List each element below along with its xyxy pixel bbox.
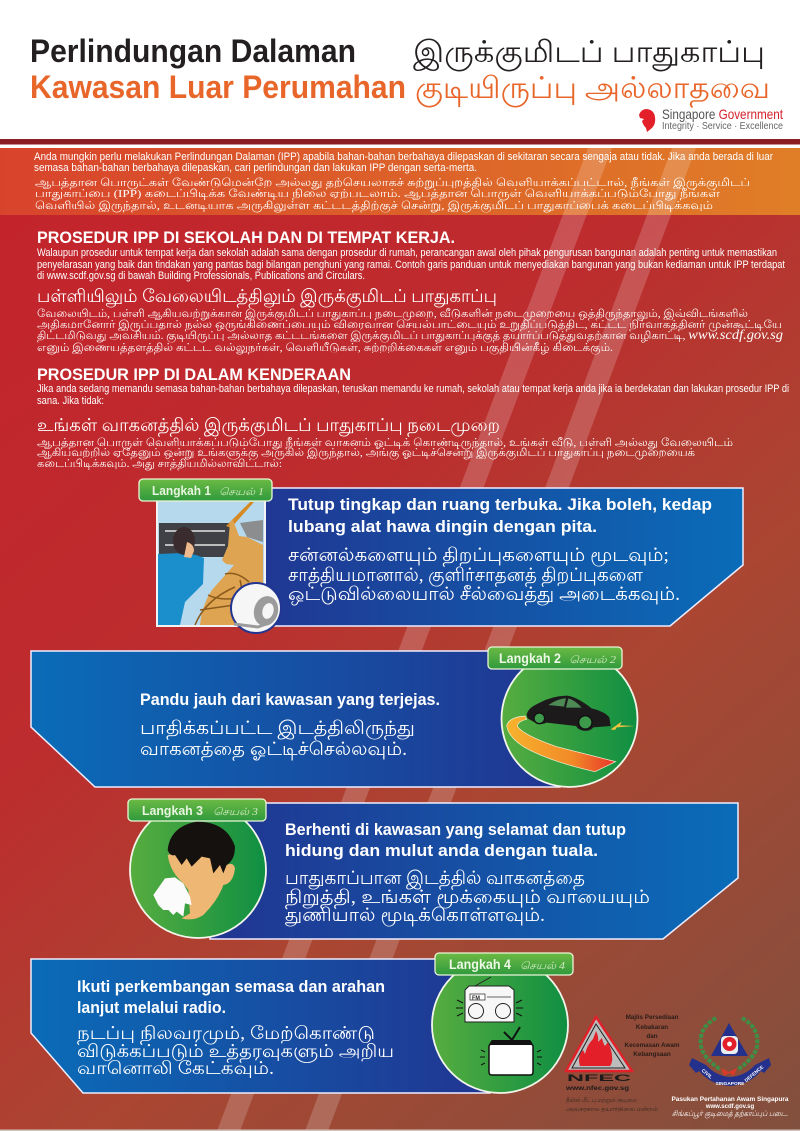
intro Tamil: ஆபத்தான பொருட்கள் வேண்டுமென்றே அல்லது தற்செயலாகச் சுற்றுப்புறத்தில் வெளியாக்கப்பட்டால், நீங்கள் இருக்குமிடப் [35, 177, 750, 191]
step 3 Tamil text [285, 869, 650, 927]
NFEC Malay name [625, 1014, 680, 1058]
body Tamil: வேலையிடம், பள்ளி ஆகியவற்றுக்கான இருக்குமிடப் பாதுகாப்பு நடைமுறை, வீடுகளின் நடைமுறையை ஒத்திருந்தாலும், இவ்விடங்களில் [37, 308, 748, 322]
intro Malay [34, 151, 773, 174]
logo: Singapore Civil Defence [672, 1018, 789, 1119]
illustration: covering nose with towel [130, 802, 266, 938]
emblem caption: Pasukan Pertahanan Awam Singapura [672, 1096, 789, 1103]
body Tamil: திட்டமிடுவது அவசியம். குடியிருப்பு அல்லாத கட்டடங்களை இருக்குமிடப் பாதுகாப்புக்குத் தயார்ப்படுத்துவதற்கான வழிகாட்டி, www.scdf.gov.sg [37, 328, 783, 344]
intro Tamil: பாதுகாப்பை (IPP) கடைப்பிடிக்க வேண்டிய நிலை ஏற்படலாம். ஆபத்தான பொருள் வெளியாக்கப்படும்போது நீங்கள் [35, 188, 720, 200]
step 3 Tamil text: பாதுகாப்பான இடத்தில் வாகனத்தை [285, 869, 585, 890]
step 1 label: செயல் 1 [219, 487, 264, 498]
intro Malay: semasa bahan-bahan berbahaya dilepaskan, cari perlindungan dan lakukan IPP dengan serta-merta. [34, 162, 477, 174]
body Tamil: ஆபத்தான பொருள் வெளியாக்கப்படும்போது நீங்கள் வாகனம் ஓட்டிக் கொண்டிருந்தால், உங்கள் வீடு, பள்ளி அல்லது வேலையிடம் [37, 437, 733, 449]
NFEC Tamil name [566, 1097, 658, 1113]
icon: merlion [639, 109, 655, 132]
step 1 label [139, 479, 272, 501]
logo text: Singapore Government [662, 106, 783, 122]
step 3 label [128, 799, 266, 821]
heading Tamil: பள்ளியிலும் வேலையிடத்திலும் இருக்குமிடப் பாதுகாப்பு [37, 286, 497, 308]
panel: step 1 [139, 479, 743, 633]
NFEC Tamil name: அவசரகால தயார்நிலை மன்றம் [566, 1107, 658, 1113]
body Tamil [37, 437, 733, 470]
step 2 label [488, 647, 622, 669]
step 1 blue panel [240, 488, 743, 626]
title [30, 33, 770, 108]
step 1 Malay text: lubang alat hawa dingin dengan pita. [288, 517, 597, 536]
step 4 Tamil text [77, 1023, 394, 1078]
step 3 Tamil text: துணியால் மூடிக்கொள்ளவும். [285, 906, 545, 927]
step 1 Malay text [288, 495, 712, 536]
step 3 label: செயல் 3 [213, 807, 258, 818]
step 4 Tamil text: வானொலி கேட்கவும். [77, 1058, 274, 1078]
icon: television [480, 1027, 542, 1075]
icon: civil defence emblem: CIVIL [700, 1068, 713, 1081]
step 3 label: Langkah 3 [142, 803, 203, 818]
step 1 label: Langkah 1 [152, 483, 211, 498]
step 1 Tamil text: ஒட்டுவில்லையால் சீல்வைத்து அடைக்கவும். [288, 585, 680, 606]
icon: tape roll [231, 583, 281, 633]
intro Tamil: வெளியில் இருந்தால், உடனடியாக அருகிலுள்ள கட்டடத்திற்குச் சென்று, இருக்குமிடப் பாதுகாப்பைக் கடைப்பிடிக்கவும் [35, 200, 713, 214]
step 2 Tamil text [140, 719, 415, 761]
title: Malay orange: Kawasan Luar Perumahan [30, 69, 406, 105]
section: in vehicle [37, 365, 789, 470]
panel: step 2 [31, 647, 638, 787]
step 2 label: செயல் 2 [569, 655, 616, 666]
title: Malay black: Perlindungan Dalaman [30, 33, 356, 69]
orange intro band background [0, 148, 800, 215]
step 1 Tamil text: சாத்தியமானால், குளிர்சாதனத் திறப்புகளை [288, 566, 644, 587]
step 4 label: செயல் 4 [520, 961, 565, 972]
diagonal background stripes [217, 148, 696, 1131]
body Tamil: அதிகமானோர் இருப்பதால் நல்ல ஒருங்கிணைப்பையும் விரைவான செயல்பாட்டையும் உறுதிப்படுத்திட, கட்டட நிர்வாகத்தினர் முன்கூட்டியே [37, 319, 782, 331]
emblem website: www.scdf.gov.sg [705, 1104, 755, 1110]
bottom edge line [0, 1130, 800, 1131]
step 4 label [435, 953, 573, 975]
step 4 label: Langkah 4 [449, 957, 511, 972]
heading Tamil: உங்கள் வாகனத்தில் இருக்குமிடப் பாதுகாப்பு நடைமுறை [37, 415, 500, 437]
step 4 blue panel [31, 959, 490, 1093]
Singapore Government logo [639, 106, 783, 132]
step 3 Tamil text: நிறுத்தி, உங்கள் மூக்கையும் வாயையும் [285, 888, 650, 909]
illustration: closing car window [157, 500, 265, 626]
NFEC Tamil name: தீயில் மீட்பு மற்றும் குடிமை [566, 1097, 637, 1105]
logo tagline: Integrity · Service · Excellence [662, 121, 783, 132]
step 1 Tamil text [288, 546, 680, 606]
icon: civil defence emblem: SINGAPORE [716, 1081, 745, 1087]
intro text [34, 151, 773, 214]
step 2 Malay text: Pandu jauh dari kawasan yang terjejas. [140, 691, 440, 709]
body Tamil [37, 308, 783, 356]
body Tamil: எனும் இணையத்தளத்தில் கட்டட வல்லுநர்கள், வெளியீடுகள், சுற்றறிக்கைகள் எனும் பகுதியின்கீழ் கிடைக்கும். [37, 342, 613, 356]
intro Tamil [35, 177, 750, 214]
step 1 Malay text: Tutup tingkap dan ruang terbuka. Jika boleh, kedap [288, 495, 712, 514]
title: Tamil black: இருக்குமிடப் பாதுகாப்பு [413, 36, 765, 71]
illustration: radio and television [432, 957, 568, 1093]
NFEC Malay name: Kecemasan Awam [625, 1042, 680, 1049]
step 2 Tamil text: வாகனத்தை ஓட்டிச்செல்லவும். [140, 740, 407, 761]
step 4 Tamil text: நடப்பு நிலவரமும், மேற்கொண்டு [77, 1023, 375, 1045]
step 3 Malay text: hidung dan mulut anda dengan tuala. [285, 842, 598, 860]
step 3 blue panel [210, 803, 738, 939]
body Tamil: கடைப்பிடிக்கவும். அது சாத்தியமில்லாவிட்டால்: [37, 458, 282, 470]
step 4 Tamil text: விடுக்கப்படும் உத்தரவுகளும் அறிய [77, 1041, 394, 1063]
body Malay: sana. Jika tidak: [37, 395, 104, 407]
NFEC website: www.nfec.gov.sg [565, 1085, 629, 1092]
icon: civil defence emblem: DEFENCE [744, 1064, 766, 1084]
title: Tamil orange: குடியிருப்பு அல்லாதவை [415, 72, 770, 108]
step 4 Malay text: Ikuti perkembangan semasa dan arahan [77, 978, 385, 996]
step 3 Malay text [285, 821, 626, 860]
step 2 blue panel [31, 651, 560, 787]
illustration: car driving away [502, 651, 638, 787]
icon: civil defence emblem [689, 1018, 771, 1087]
step 4 Malay text [77, 978, 385, 1017]
step 2 label: Langkah 2 [499, 651, 561, 666]
body Malay: di www.scdf.gov.sg di bawah Building Professionals, Publications and Circulars. [37, 270, 365, 282]
NFEC Malay name: Kebangsaan [633, 1051, 671, 1058]
NFEC Malay name: Kebakaran [636, 1024, 668, 1031]
logo: NFEC [565, 1014, 680, 1113]
emblem Tamil caption: சிங்கப்பூர் குடிமைத் தற்காப்புப் படை. [672, 1109, 788, 1119]
NFEC Malay name: dan [646, 1033, 658, 1040]
icon: NFEC flame triangle [566, 1017, 632, 1071]
NFEC wordmark: NFEC [567, 1073, 631, 1084]
header dark red rule [0, 139, 800, 144]
body Malay [37, 247, 785, 282]
heading Malay: PROSEDUR IPP DI DALAM KENDERAAN [37, 365, 351, 384]
step 4 Malay text: lanjut melalui radio. [77, 999, 226, 1017]
body Tamil: ஆகியவற்றில் ஏதேனும் ஒன்று உங்களுக்கு அருகில் இருந்தால், அங்கு ஓட்டிச்சென்று இருக்குமிடப் பாதுகாப்பு நடைமுறையைக் [37, 447, 695, 461]
step 3 Malay text: Berhenti di kawasan yang selamat dan tutup [285, 821, 626, 839]
panel: step 3 [128, 799, 738, 939]
step 2 Tamil text: பாதிக்கப்பட்ட இடத்திலிருந்து [140, 719, 415, 740]
panel: step 4 [31, 953, 573, 1093]
heading Malay: PROSEDUR IPP DI SEKOLAH DAN DI TEMPAT KERJA. [37, 228, 455, 247]
step 1 Tamil text: சன்னல்களையும் திறப்புகளையும் மூடவும்; [288, 546, 669, 567]
body Malay [37, 383, 789, 407]
NFEC Malay name: Majlis Persediaan [626, 1014, 679, 1021]
section: school and workplace [37, 228, 785, 356]
icon: radio: FM [472, 996, 480, 1002]
